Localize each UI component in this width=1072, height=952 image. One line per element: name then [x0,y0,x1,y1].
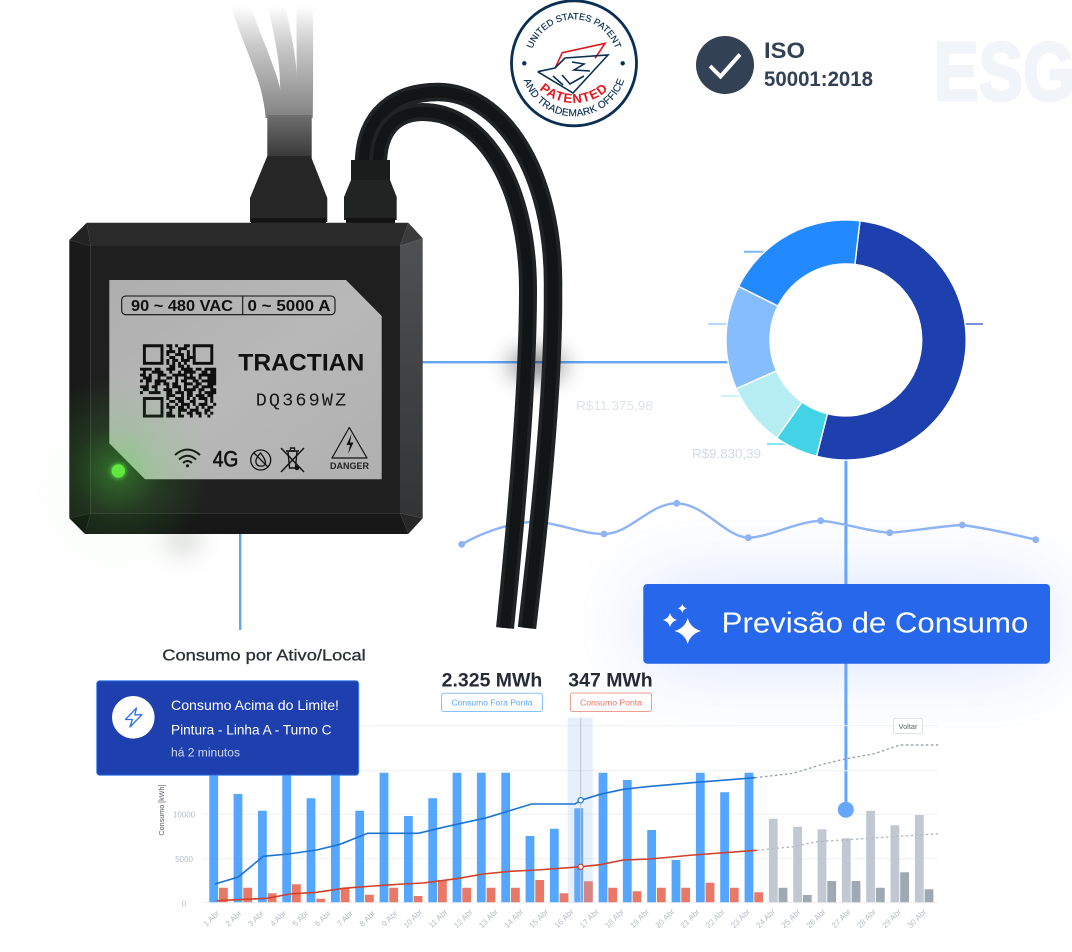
dark grey forecast bars [779,872,933,902]
green glow on device [70,393,196,534]
combo chart [157,718,938,930]
date axis labels: 24 Abr [754,907,777,930]
date axis labels: 8 Abr [358,909,377,928]
date axis labels: 19 Abr [628,907,651,930]
KPI: consumo ponta: 347 MWh [568,671,653,692]
date axis labels: 16 Abr [553,907,576,930]
blue bars: consumo fora ponta [209,773,753,902]
KPI: consumo ponta [568,671,653,712]
forecast button label: Previsão de Consumo [722,608,1028,640]
heading: Consumo por Ativo/Local: Consumo por Ativo/Local [162,648,366,664]
date axis labels: 1 Abr [202,909,221,928]
KPI: consumo fora ponta: Consumo Fora Ponta [452,698,533,708]
connector line: device to chart [239,530,241,630]
patent seal: UNITED STATES PATENT [526,12,622,48]
date axis labels: 30 Abr [906,907,929,930]
alert card: Pintura - Linha A - Turno C [171,722,332,738]
icon: sparkles [663,604,701,644]
device drop shadow [166,526,200,554]
line markers [578,798,583,869]
date axis labels: 21 Abr [679,907,702,930]
date axis labels: 7 Abr [335,909,355,928]
date axis labels: 23 Abr [729,907,752,930]
date axis labels: 20 Abr [654,907,677,930]
date axis labels: 18 Abr [603,907,626,930]
text: R$11.375,98: R$11.375,98 [576,398,653,413]
serial number: DQ369WZ [256,391,346,412]
date axis labels: 3 Abr [246,909,266,928]
alert card: Consumo Acima do Limite! [171,697,339,713]
y axis labels: 10000 [173,810,196,820]
icon: crossed-out bin [281,448,304,472]
date axis labels: 17 Abr [578,907,601,930]
spec box: 90 ~ 480 VAC [131,298,233,315]
grey sensor cables [240,4,305,118]
date axis labels: 9 Abr [380,909,400,928]
KPI: consumo ponta: Consumo Ponta [580,698,642,708]
icon: lightning bolt [112,696,155,739]
spec box: 0 ~ 5000 A [248,298,331,315]
date axis labels: 5 Abr [291,909,311,928]
spec box [122,296,335,315]
icon: danger sign [330,428,369,471]
date axis labels [202,907,929,930]
icon: danger sign: DANGER [330,461,369,471]
y axis labels [157,784,196,908]
text: 4G: 4G [213,447,238,472]
KPI: consumo fora ponta [442,671,542,712]
date axis labels: 2 Abr [224,909,244,928]
date axis labels: 25 Abr [780,907,803,930]
patent seal: AND TRADEMARK OFFICE [524,78,624,116]
date axis labels: 22 Abr [704,907,727,930]
TRACTIAN logo text: TRACTIAN [238,350,364,377]
patent seal [510,0,638,128]
y axis labels: Consumo [kWh] [157,784,166,836]
connector line: donut to chart marker [844,455,847,810]
Voltar button [894,718,922,734]
device body [69,223,423,535]
date axis labels: 27 Abr [830,907,853,930]
alert card [97,681,359,775]
forecast dashed line lower [757,834,938,850]
date axis labels: 15 Abr [528,907,551,930]
KPI: consumo fora ponta: 2.325 MWh [442,671,542,692]
wave line chart [458,500,1039,548]
label plate [109,280,382,479]
icon: no water [251,450,271,470]
ISO badge [696,36,873,94]
date axis labels: 6 Abr [313,909,333,928]
forecast button [643,584,1050,664]
ISO badge: 50001:2018 [764,68,873,91]
ISO badge: ISO [764,38,805,63]
PATENTED stamp text: PATENTED [540,83,606,104]
grey forecast bars [769,811,924,902]
date axis labels: 12 Abr [452,907,475,930]
red bars: consumo ponta [219,880,763,902]
background glow behind forecast button [643,584,1050,664]
forecast dashed line upper [755,745,938,778]
date axis labels: 26 Abr [805,907,828,930]
date axis labels: 14 Abr [502,907,525,930]
red trend line [217,850,757,901]
date axis labels: 10 Abr [402,907,425,930]
y axis labels: 0 [182,900,187,908]
donut chart [708,220,983,460]
right connector [344,160,397,224]
date axis labels: 28 Abr [855,907,878,930]
text: R$9.830,39: R$9.830,39 [692,446,761,461]
black power cables [364,92,553,628]
date axis labels: 4 Abr [268,909,288,928]
green LED [110,462,127,480]
alert card: há 2 minutos [171,747,240,759]
Voltar button: Voltar [899,722,918,731]
date axis labels: 11 Abr [427,907,450,930]
date axis labels: 13 Abr [477,907,500,930]
date axis labels: 29 Abr [880,907,903,930]
shadow on line behind black cables [509,351,565,379]
blue trend line [215,778,755,884]
left connector [250,115,327,224]
green LED halo [33,405,203,575]
eagle logo [538,43,608,93]
icon: wifi [175,450,200,467]
QR code [140,344,216,418]
forecast marker dot [838,802,854,818]
connector line: device to donut [420,361,730,363]
y axis labels: 5000 [175,855,193,864]
highlighted day band [568,718,593,902]
